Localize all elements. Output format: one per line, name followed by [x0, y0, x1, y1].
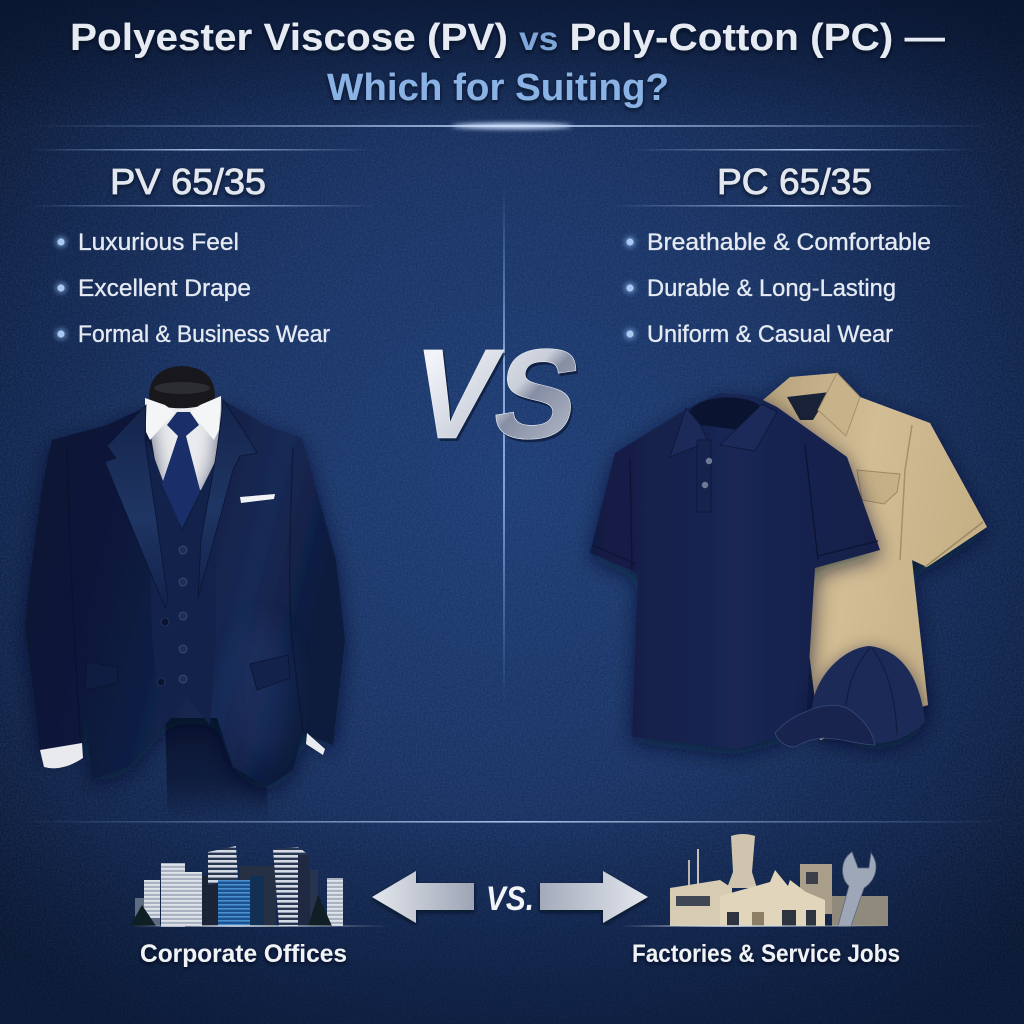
PC feature list: Uniform & Casual Wear: [647, 321, 893, 348]
khaki collar point: [818, 373, 860, 436]
icon: corporate office buildings: [130, 846, 390, 927]
label: corporate offices: Corporate Offices: [140, 940, 347, 968]
panel: PC 65/35 heading: PC 65/35: [717, 161, 872, 202]
vest buttons: [179, 546, 187, 683]
PV feature list: Luxurious Feel: [78, 229, 239, 256]
jacket buttons: [161, 618, 169, 626]
panel: PV 65/35 heading: PV 65/35: [110, 161, 266, 202]
khaki shirt inner collar: [787, 392, 830, 420]
right lapel: [198, 400, 257, 598]
mannequin neck: [149, 366, 215, 420]
PV feature list: Excellent Drape: [78, 275, 251, 302]
PV feature list: [55, 229, 330, 348]
label: factories and service jobs: Factories & Service Jobs: [632, 940, 900, 968]
VS emblem: VS: [400, 323, 592, 466]
PC feature list: Durable & Long-Lasting: [647, 275, 896, 302]
cap panels: [846, 648, 897, 735]
left shirt cuff: [40, 743, 83, 768]
pocket square: [240, 494, 275, 503]
PV feature list: Formal & Business Wear: [78, 321, 330, 348]
polo sleeve seams: [630, 445, 818, 570]
label: vs.: VS.: [486, 880, 534, 918]
VS emblem: VS: [402, 326, 594, 469]
jacket body and sleeves: [25, 400, 345, 787]
cap brim: [775, 705, 875, 747]
illustration: navy three-piece suit on mannequin: [25, 366, 345, 822]
soft highlight on right jacket front: [232, 620, 292, 760]
centre divider line: [503, 185, 505, 705]
left lapel: [105, 405, 168, 608]
waistcoat: [147, 438, 216, 728]
PC feature list: [624, 229, 931, 348]
title: Which for Suiting?: [327, 67, 669, 109]
sleeve seams: [67, 447, 303, 745]
icon: factory and wrench: [620, 834, 890, 927]
khaki sleeve seam: [900, 425, 912, 560]
bottom divider: [20, 821, 1005, 823]
title: Polyester Viscose (PV) vs Poly-Cotton (PC) —: [70, 17, 945, 59]
arrow: towards factories: [540, 871, 648, 923]
title divider: [30, 123, 995, 129]
khaki shirt: [763, 373, 987, 740]
suit trousers: [165, 715, 268, 822]
navy cap: [812, 646, 925, 743]
flap pockets: [85, 662, 118, 690]
right shirt cuff: [306, 733, 325, 755]
polo collar: [670, 397, 777, 457]
title: [70, 17, 945, 109]
white shirt: [145, 396, 222, 490]
tie: [162, 412, 200, 528]
shirt collar: [145, 396, 221, 440]
polo placket and buttons: [697, 440, 712, 512]
khaki shirt pocket: [857, 470, 900, 504]
illustration: khaki work shirt, navy polo and cap: [590, 373, 987, 749]
arrow: towards corporate offices: [372, 871, 474, 923]
navy polo shirt: [590, 393, 880, 749]
PC feature list: Breathable & Comfortable: [647, 229, 931, 256]
